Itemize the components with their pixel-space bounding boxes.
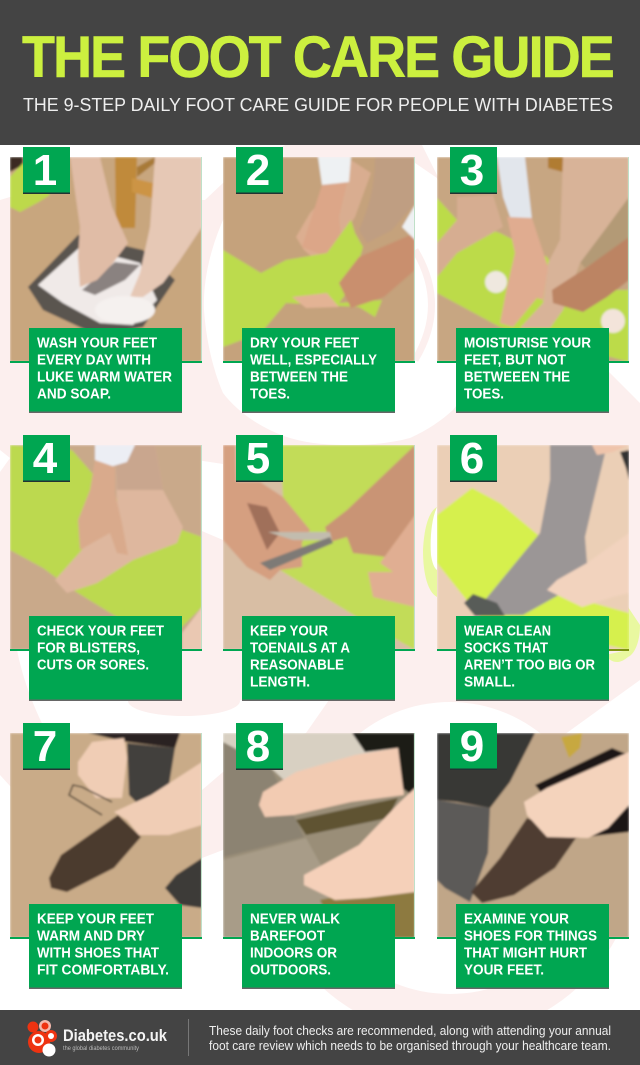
caption 9	[456, 904, 609, 989]
caption 2	[242, 328, 395, 413]
caption 1	[29, 328, 182, 413]
caption 9: SHOES FOR THINGS	[464, 928, 597, 944]
number 7	[23, 722, 70, 771]
caption 8	[242, 904, 395, 989]
caption 5: TOENAILS AT A	[250, 640, 350, 656]
caption 3: MOISTURISE YOUR	[464, 336, 591, 352]
panel: step 4	[10, 434, 202, 701]
panel: step 2	[223, 146, 415, 413]
logo tagline: the global diabetes community	[63, 1046, 139, 1052]
number 3: 3	[460, 146, 484, 195]
footer note	[209, 1023, 611, 1053]
caption 7: FIT COMFORTABLY.	[37, 962, 169, 978]
number 2	[236, 146, 283, 195]
caption 7	[29, 904, 182, 989]
title: THE FOOT CARE GUIDE	[22, 24, 613, 89]
panel: step 5	[223, 434, 415, 701]
footer note: foot care review which needs to be organised through your healthcare team.	[209, 1038, 611, 1053]
caption 4	[29, 616, 182, 701]
caption 1: AND SOAP.	[37, 386, 111, 402]
photo: bare feet on paving	[223, 733, 415, 938]
photo: moisturising feet	[437, 157, 629, 362]
number 2: 2	[246, 146, 270, 195]
subtitle: THE 9-STEP DAILY FOOT CARE GUIDE FOR PEOPLE WITH DIABETES	[23, 95, 613, 115]
caption 6: WEAR CLEAN	[464, 624, 551, 640]
panel: step 8	[223, 722, 415, 989]
header band	[0, 0, 640, 145]
caption 4: CHECK YOUR FEET	[37, 624, 164, 640]
caption 8: OUTDOORS.	[250, 962, 331, 978]
number 6	[450, 434, 497, 483]
caption 2: TOES.	[250, 386, 290, 402]
panel: step 1	[10, 146, 202, 413]
caption 2: DRY YOUR FEET	[250, 336, 359, 352]
photo: checking the foot	[10, 445, 202, 650]
number 4: 4	[33, 434, 58, 483]
caption 2: BETWEEN THE	[250, 370, 348, 386]
number 3	[450, 146, 497, 195]
caption 1: WASH YOUR FEET	[37, 336, 157, 352]
caption 3: BETWEEEN THE	[464, 370, 570, 386]
number 8: 8	[246, 722, 270, 771]
caption 6: AREN’T TOO BIG OR	[464, 658, 595, 674]
number 1	[23, 146, 70, 195]
caption 7: WITH SHOES THAT	[37, 946, 159, 962]
number 9	[450, 722, 497, 771]
number 1: 1	[33, 146, 57, 195]
icon: Diabetes.co.uk logo	[28, 1020, 57, 1056]
number 9: 9	[460, 722, 484, 771]
caption 8: NEVER WALK	[250, 912, 340, 928]
caption 3: FEET, BUT NOT	[464, 352, 566, 368]
caption 9: THAT MIGHT HURT	[464, 946, 587, 962]
caption 5: REASONABLE	[250, 658, 344, 674]
caption 6: SOCKS THAT	[464, 640, 548, 656]
caption 1: EVERY DAY WITH	[37, 352, 151, 368]
caption 5	[242, 616, 395, 701]
caption 7: WARM AND DRY	[37, 928, 145, 944]
caption 2: WELL, ESPECIALLY	[250, 352, 377, 368]
caption 8: BAREFOOT	[250, 928, 325, 944]
caption 1: LUKE WARM WATER	[37, 370, 172, 386]
panel: step 7	[10, 722, 202, 989]
number 7: 7	[33, 722, 57, 771]
panel: step 3	[437, 146, 629, 413]
footer note: These daily foot checks are recommended, along with attending your annual	[209, 1023, 611, 1038]
photo: wearing a clean sock	[437, 445, 629, 650]
photo: drying feet with a towel	[223, 157, 415, 362]
caption 7: KEEP YOUR FEET	[37, 912, 154, 928]
caption 4: CUTS OR SORES.	[37, 658, 149, 674]
logo wordmark: Diabetes.co.uk	[63, 1026, 167, 1045]
photo: washing feet in a basin	[10, 157, 202, 362]
caption 6: SMALL.	[464, 674, 515, 690]
number 4	[23, 434, 70, 483]
number 5: 5	[246, 434, 270, 483]
number 5	[236, 434, 283, 483]
caption 8: INDOORS OR	[250, 946, 337, 962]
panel: step 9	[437, 722, 629, 989]
caption 5: KEEP YOUR	[250, 624, 328, 640]
caption 9: YOUR FEET.	[464, 962, 544, 978]
number 8	[236, 722, 283, 771]
caption 3: TOES.	[464, 386, 504, 402]
photo: tying a shoe	[10, 733, 202, 938]
caption 5: LENGTH.	[250, 674, 310, 690]
panel: step 6	[437, 434, 629, 701]
caption 4: FOR BLISTERS,	[37, 640, 140, 656]
caption 3	[456, 328, 609, 413]
footer band	[0, 1010, 640, 1065]
photo: examining a shoe	[437, 733, 629, 938]
number 6: 6	[460, 434, 484, 483]
caption 6	[456, 616, 609, 701]
caption 9: EXAMINE YOUR	[464, 912, 569, 928]
photo: clipping toenails	[223, 445, 415, 650]
